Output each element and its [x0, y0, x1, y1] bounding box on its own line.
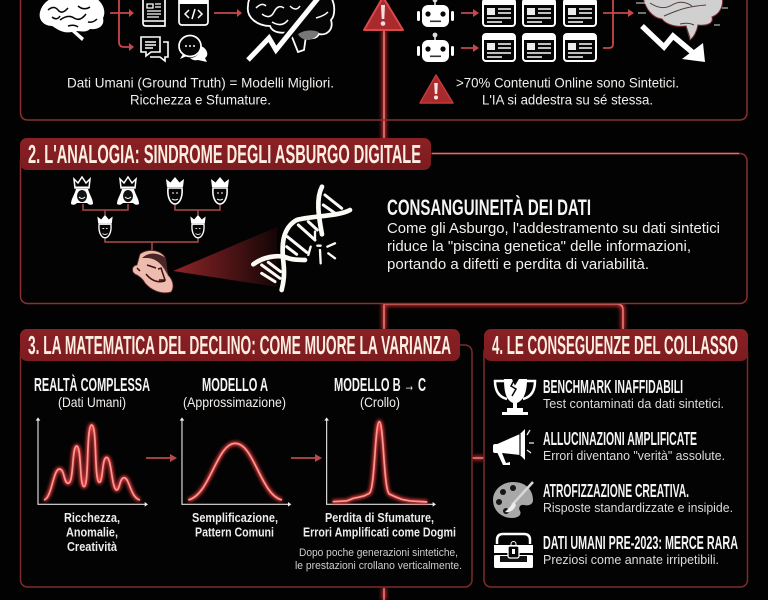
panel 4 frame — [484, 345, 748, 587]
column 1 title: REALTÀ COMPLESSA — [34, 374, 150, 395]
column 1 caption: Anomalie, — [66, 524, 118, 540]
column 3 caption: Errori Amplificati come Dogmi — [303, 524, 456, 540]
column 2 caption: Semplificazione, — [192, 510, 278, 525]
item: pre-2023 human data — [543, 533, 738, 567]
item: creative atrophy — [543, 481, 733, 515]
column: model B to C — [295, 375, 462, 572]
text: human data caption — [67, 76, 334, 108]
panel 4: consequences — [484, 329, 748, 587]
icons: robots — [417, 0, 454, 62]
icon: speech bubbles — [179, 36, 207, 62]
arrows: synthetic data flow — [461, 0, 634, 52]
icon: Habsburg face — [132, 250, 173, 293]
icon: outlined brain with rising arrow — [248, 0, 334, 60]
icon: chat bubbles — [141, 37, 168, 61]
column 1 title — [34, 374, 150, 410]
column 2 caption — [192, 510, 278, 540]
column 2 caption: Pattern Comuni — [195, 524, 274, 540]
column 1 title: (Dati Umani) — [58, 395, 126, 410]
text: synthetic data caption: >70% Contenuti Online sono Sintetici. — [456, 76, 679, 90]
column: complex reality — [34, 374, 150, 554]
column 2 title — [183, 375, 286, 410]
connector lines — [384, 30, 623, 600]
note: le prestazioni crollano verticalmente. — [295, 560, 462, 572]
text: data inbreeding: portando a difetti e perdita di variabilità. — [387, 256, 649, 273]
chart: collapsed spike — [324, 417, 436, 507]
heading 2 — [20, 138, 431, 170]
projection cone — [173, 227, 277, 287]
panel 1 frame — [20, 0, 747, 120]
item: benchmark — [543, 377, 724, 411]
column 1 caption — [64, 510, 120, 554]
chart: bell curve — [180, 417, 291, 507]
family tree — [71, 177, 229, 250]
arrow — [291, 454, 322, 462]
column 2 title: MODELLO A — [202, 375, 268, 395]
item: hallucinations: Errori diventano "verità" assolute. — [543, 448, 725, 463]
item: creative atrophy: Risposte standardizzate e insipide. — [543, 500, 733, 515]
item: pre-2023 human data: Preziosi come annate irripetibili. — [543, 552, 719, 567]
column 3 title: (Crollo) — [360, 395, 400, 410]
text: human data caption: Dati Umani (Ground Truth) = Modelli Migliori. — [67, 76, 334, 90]
icon: megaphone — [493, 429, 534, 465]
icon: book — [143, 0, 165, 26]
icon: locked chest — [494, 534, 533, 568]
heading 2: 2. L'ANALOGIA: SINDROME DEGLI ASBURGO DIGITALE — [28, 141, 421, 169]
panel 3 frame — [20, 345, 472, 587]
heading 3 — [20, 329, 460, 361]
column 1 caption: Ricchezza, — [64, 510, 120, 525]
column 3 caption: Perdita di Sfumature, — [325, 510, 434, 525]
text: data inbreeding: Come gli Asburgo, l'addestramento su dati sintetici — [387, 220, 720, 237]
note: Dopo poche generazioni sintetiche, — [299, 547, 458, 559]
chart: multi-peak distribution — [36, 417, 148, 507]
panel 1: comparison — [20, 0, 747, 120]
column 3 title: MODELLO B → C — [334, 375, 426, 395]
column 2 title: (Approssimazione) — [183, 395, 286, 410]
arrow — [146, 454, 177, 462]
icon: falling arrow — [642, 26, 705, 62]
column 1 caption: Creatività — [67, 539, 118, 554]
text: data inbreeding: CONSANGUINEITÀ DEI DATI — [387, 195, 591, 220]
text: data inbreeding — [387, 195, 720, 273]
icon: palette — [493, 482, 533, 518]
arrows: human data flow — [110, 0, 242, 51]
icon: broken trophy — [495, 377, 535, 415]
icon: broken DNA — [253, 187, 350, 290]
text: human data caption: Ricchezza e Sfumature. — [130, 92, 271, 108]
text: synthetic data caption — [456, 76, 679, 108]
note — [295, 547, 462, 572]
item: benchmark: Test contaminati da dati sintetici. — [543, 396, 724, 411]
text: synthetic data caption: L'IA si addestra su sé stessa. — [482, 92, 653, 108]
icon: code window — [179, 0, 208, 25]
column 3 title — [334, 375, 426, 410]
icon: small warning triangle — [420, 75, 453, 103]
icon: white brain — [40, 0, 104, 41]
panel 3: math of decline — [20, 329, 472, 587]
icon: degraded brain — [636, 0, 728, 40]
column 3 caption — [303, 510, 456, 540]
column: model A — [180, 375, 291, 540]
icons: synthetic content windows — [483, 0, 596, 61]
panel 2 frame — [20, 154, 747, 304]
text: data inbreeding: riduce la "piscina genetica" delle informazioni, — [387, 238, 691, 255]
panel 2: Habsburg analogy — [20, 138, 747, 304]
icon: red warning triangle — [364, 0, 403, 30]
item: hallucinations — [543, 429, 725, 463]
